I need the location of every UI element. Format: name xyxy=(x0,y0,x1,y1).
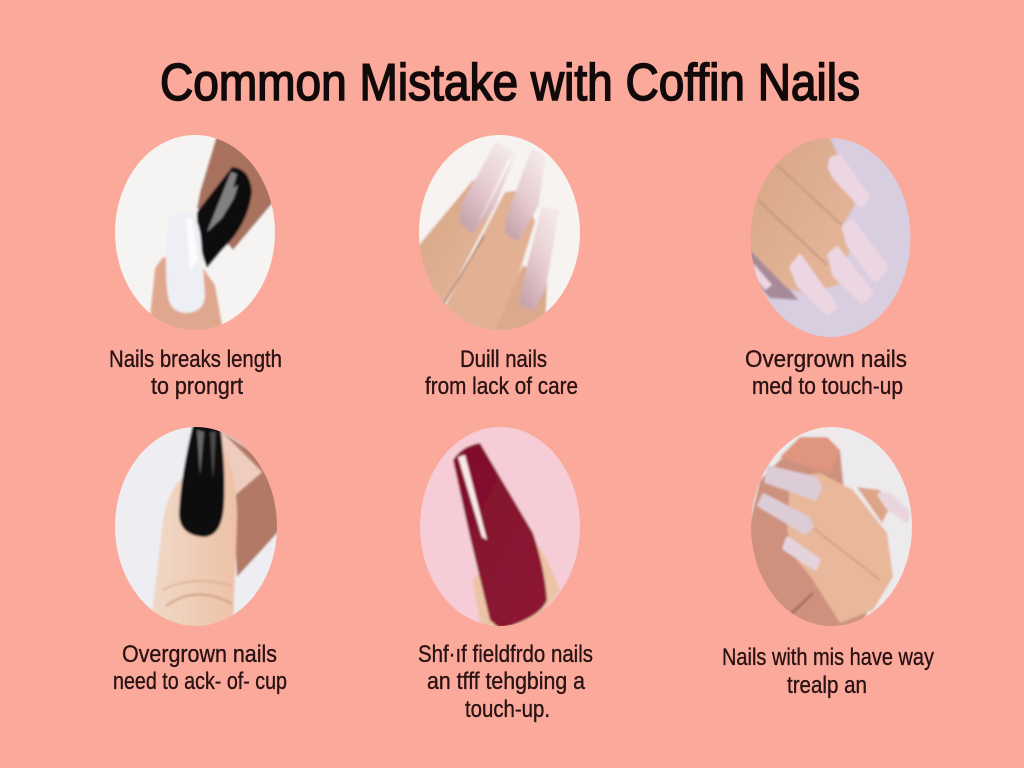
panel: overgrown nails top xyxy=(745,130,915,400)
photo: black nail on finger xyxy=(115,427,277,626)
caption: Nails breaks length xyxy=(109,346,282,373)
caption: an tfff tehgbing a xyxy=(427,668,586,695)
panel: nails breaks length xyxy=(109,130,282,400)
panel: nails with mis xyxy=(722,422,934,699)
title: Common Mistake with Coffin Nails xyxy=(160,54,860,112)
photo: pale ombre nails xyxy=(415,130,585,335)
panel: dull nails xyxy=(415,130,585,400)
caption: Duill nails xyxy=(460,346,547,373)
caption xyxy=(745,346,907,400)
caption: Shf·ıf fieldfrdo nails xyxy=(418,641,593,668)
photo: hand with lilac nails xyxy=(751,427,912,626)
caption: need to ack- of- cup xyxy=(113,668,287,695)
caption: Nails with mis have way xyxy=(722,644,934,671)
panel: overgrown nails bottom xyxy=(110,422,287,695)
caption xyxy=(113,641,287,695)
photo: white and black nails xyxy=(115,135,275,330)
caption: Overgrown nails xyxy=(122,641,277,668)
caption: from lack of care xyxy=(425,373,578,400)
caption xyxy=(418,641,593,723)
panel: burgundy nail xyxy=(415,422,593,723)
caption: Overgrown nails xyxy=(745,346,907,373)
caption: trealp an xyxy=(787,672,867,699)
caption: to prongrt xyxy=(151,373,243,400)
caption xyxy=(722,644,934,699)
caption: touch-up. xyxy=(465,696,550,723)
caption: med to touch-up xyxy=(752,373,903,400)
photo: burgundy coffin nail xyxy=(420,427,580,626)
caption xyxy=(109,346,282,400)
photo: lilac nails on textured surface xyxy=(750,138,910,337)
caption xyxy=(425,346,578,400)
